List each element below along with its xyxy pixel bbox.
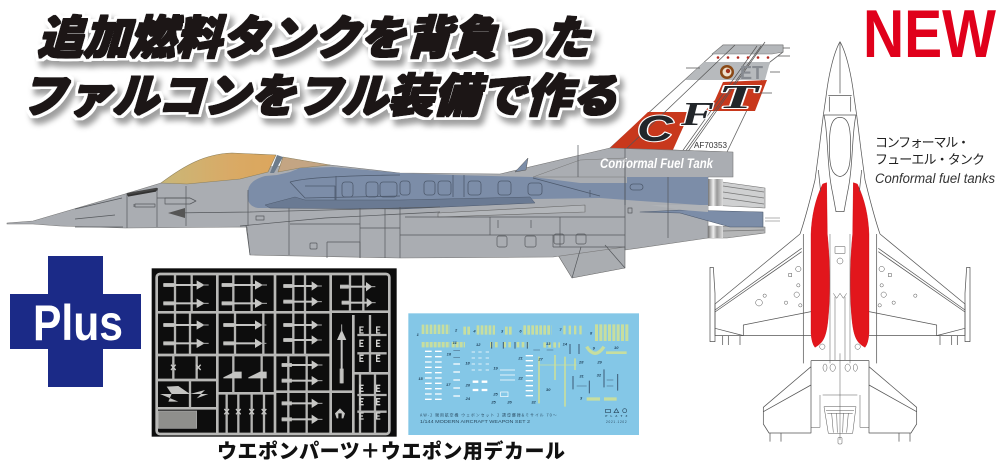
- weapon decal sheet: [408, 313, 639, 435]
- decal numbers: 2: [454, 327, 458, 332]
- callout: conformal fuel tanks: コンフォーマル・: [875, 132, 970, 151]
- decal numbers: 25: [490, 400, 497, 405]
- tail letters CFT: F: [680, 96, 714, 133]
- exhaust nozzle: [824, 353, 856, 440]
- decal numbers: 6: [519, 329, 522, 334]
- nozzle: [708, 179, 780, 238]
- decal numbers: 27: [537, 356, 544, 361]
- decal numbers: 10: [614, 345, 619, 350]
- tail: [763, 361, 917, 433]
- dark marks: [453, 342, 618, 393]
- decal numbers: 20: [465, 383, 471, 388]
- decal numbers: 11: [453, 340, 457, 345]
- ventral fin: [553, 247, 625, 278]
- spine light panel: [533, 158, 625, 177]
- decal numbers: 21: [517, 356, 523, 361]
- tail letters CFT: T: [718, 79, 760, 116]
- dorsal antenna: [515, 158, 528, 172]
- decal numbers: 7: [559, 327, 562, 332]
- decal sheet label: AW-2 現用航空機 ウェポンセット 2 誘導爆弾&ミサイル 70〜: [420, 412, 557, 418]
- tail letters CFT: C: [637, 108, 674, 149]
- decal numbers: 17: [446, 382, 451, 387]
- bomb and wedges: [160, 372, 345, 418]
- tail fin: [610, 42, 790, 177]
- wings: [715, 234, 965, 336]
- title: [16, 1, 632, 126]
- decal stripes: [422, 329, 628, 407]
- decal numbers: 14: [563, 341, 568, 346]
- white marks: [428, 351, 529, 403]
- decal numbers: 4: [472, 329, 476, 334]
- fuselage: [7, 148, 733, 258]
- decal numbers: 22: [517, 375, 524, 380]
- decal numbers: 15: [418, 376, 424, 381]
- caption: weapon parts + decals: ウエポンパーツ＋ウエポン用デカール: [217, 435, 565, 464]
- canopy: [161, 153, 330, 184]
- title: ファルコンをフル装備で作る: [16, 59, 632, 126]
- decal numbers: 25: [492, 391, 499, 396]
- blue details: [290, 175, 643, 205]
- wing details: [756, 266, 917, 307]
- top view diagram: [710, 42, 970, 444]
- jet side view: [7, 42, 790, 278]
- fuselage outline: [800, 42, 880, 234]
- decal numbers: 30: [546, 387, 551, 392]
- tail code ET: ET: [740, 63, 763, 83]
- sprue runners: [173, 275, 387, 433]
- gauge plate: [158, 411, 197, 428]
- red conformal tanks: [811, 183, 869, 347]
- decal numbers: 16: [447, 351, 452, 356]
- plus badge: [10, 256, 141, 387]
- frame: [157, 274, 389, 434]
- centre fuselage: [820, 234, 860, 371]
- decal numbers: 3: [501, 329, 504, 334]
- clips: [171, 327, 380, 419]
- decal numbers: 31: [579, 373, 584, 378]
- callout: conformal fuel tanks: Conformal fuel tanks: [875, 171, 995, 186]
- decal numbers: 32: [531, 400, 537, 405]
- decal numbers: 18: [465, 360, 471, 365]
- squadron badge: [720, 65, 734, 79]
- fin text: Conformal Fuel Tank: [600, 155, 714, 171]
- decal numbers: 9: [593, 345, 596, 350]
- decal numbers: 26: [506, 400, 513, 405]
- decal sheet label: 1/144 MODERN AIRCRAFT WEAPON SET 2: [420, 419, 531, 424]
- decal sheet label: P L A T Z: [605, 414, 628, 418]
- decal numbers: 29: [596, 359, 603, 364]
- decal numbers: 28: [578, 359, 584, 364]
- callout: conformal fuel tanks: フューエル・タンク: [875, 149, 985, 168]
- decal numbers: 32: [597, 373, 602, 378]
- tail letters CFT: [637, 79, 760, 149]
- decal numbers: 8: [590, 331, 593, 336]
- title: 追加燃料タンクを背負った: [33, 1, 604, 68]
- camouflage blue: [247, 167, 708, 208]
- decal numbers: 19: [493, 365, 499, 370]
- panel lines: [75, 145, 668, 278]
- decal sheet label: [420, 409, 628, 424]
- decal sheet label: 2021.1202: [606, 420, 627, 424]
- missiles: [163, 280, 376, 424]
- decal numbers: 13: [546, 341, 551, 346]
- decal numbers: 24: [465, 396, 471, 401]
- decal numbers: [417, 327, 619, 405]
- decal numbers: 3: [580, 396, 583, 401]
- serial number: AF70353: [694, 140, 727, 150]
- plus badge: Plus: [33, 295, 123, 351]
- conformal tank strip: [438, 205, 585, 217]
- photo-etched weapon parts sheet: [152, 268, 397, 437]
- callout: conformal fuel tanks: [875, 132, 995, 186]
- lower tail fin blue: [640, 210, 763, 227]
- decal numbers: 1: [417, 332, 419, 337]
- decal numbers: 12: [476, 342, 481, 347]
